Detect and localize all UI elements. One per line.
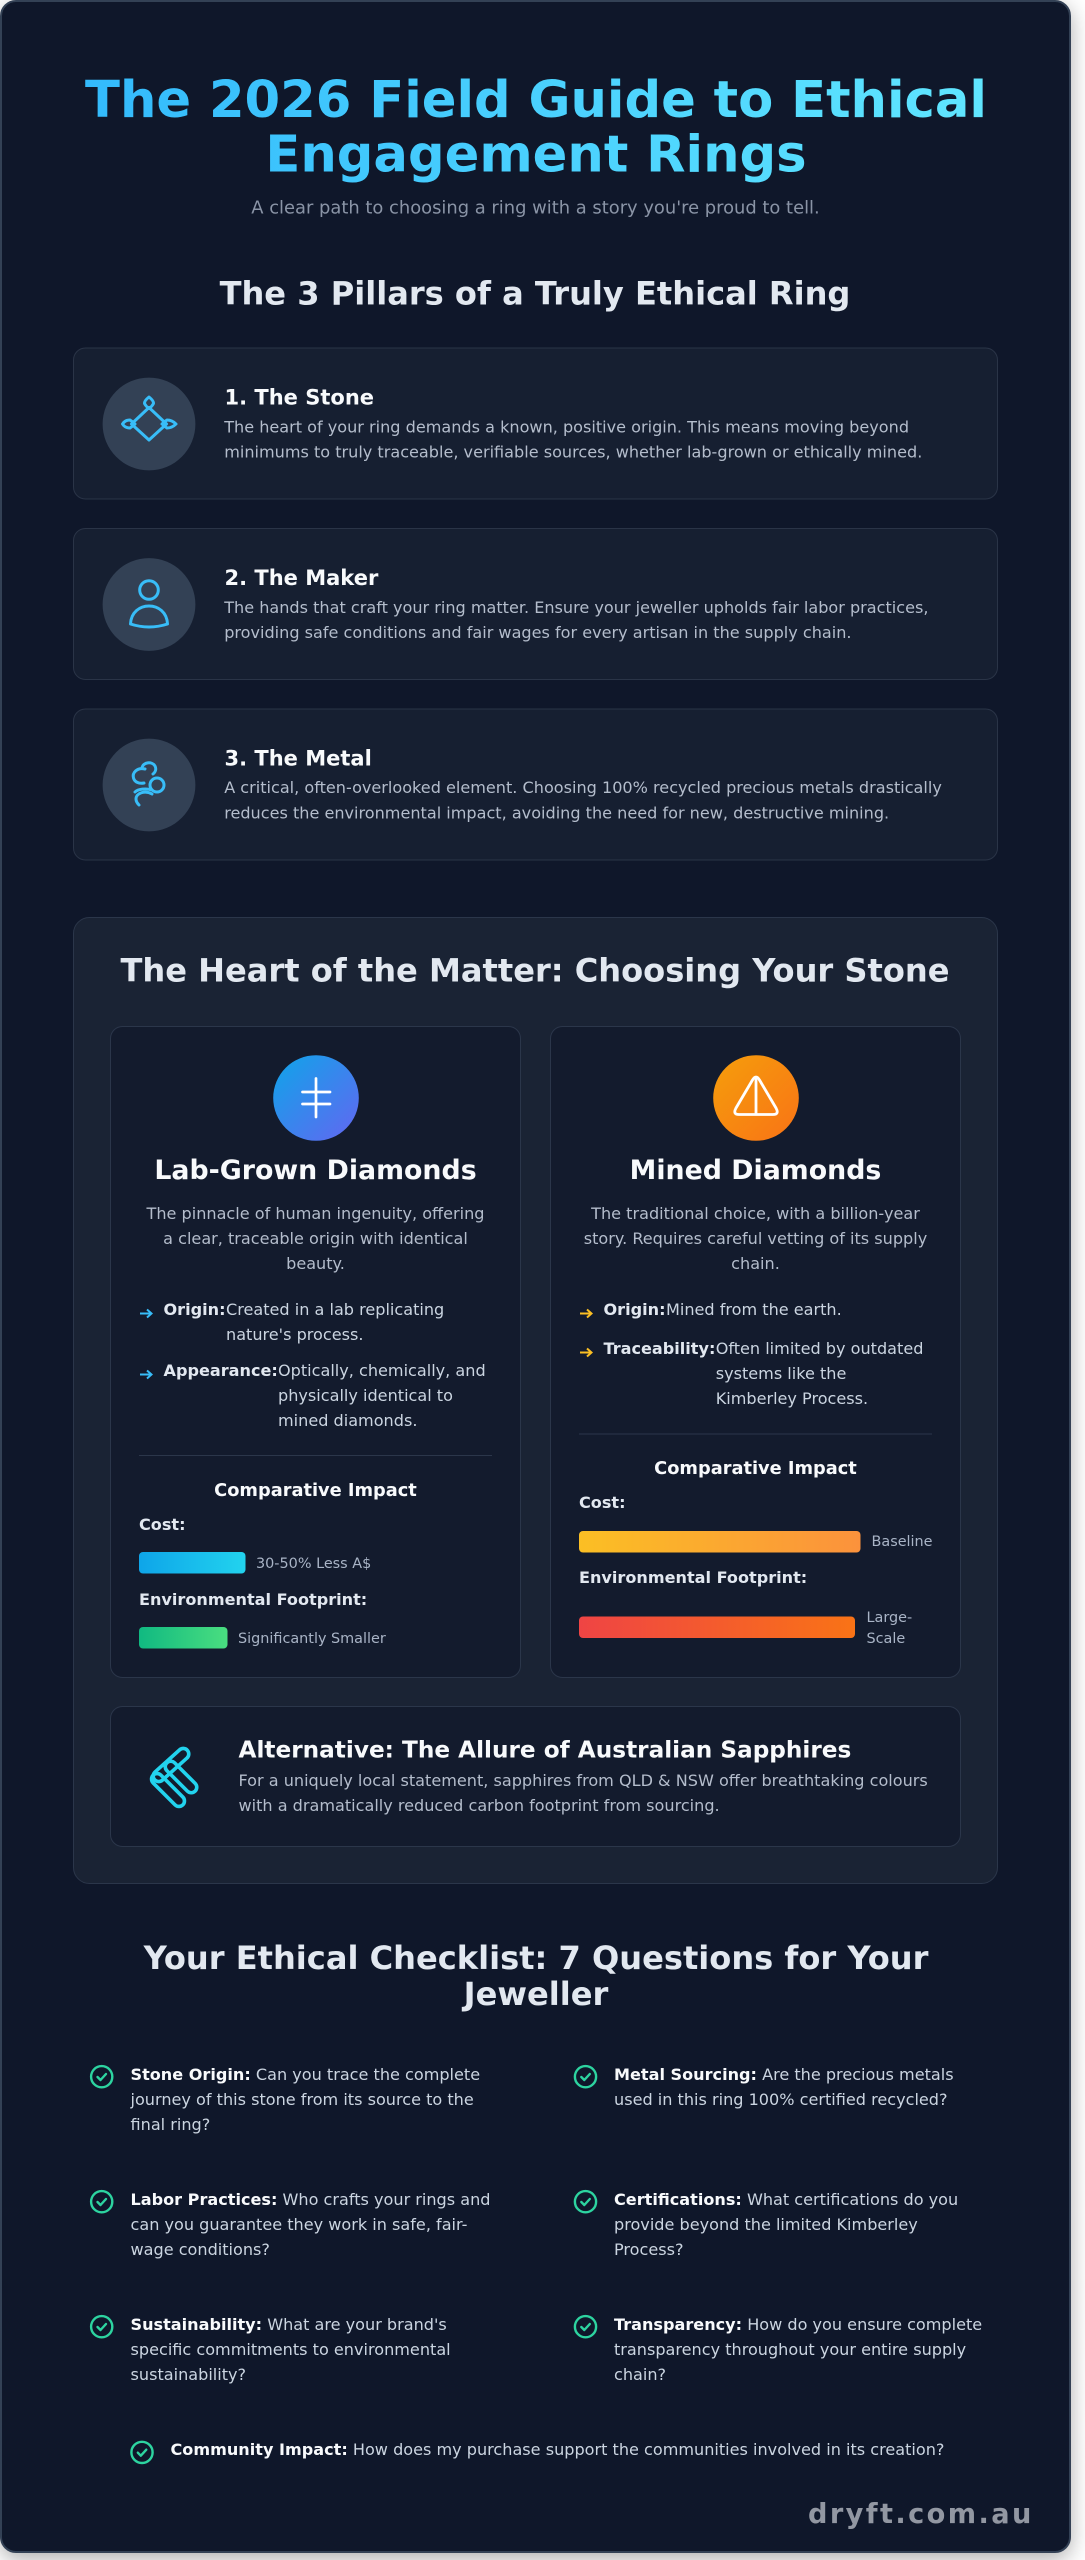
metal text: A critical, often-overlooked element. Choosing 100% recycled precious metals drastically [224,778,942,797]
list item: traceability [580,1339,923,1408]
bar: cost [139,1515,371,1574]
list item: origin: nature's process. [226,1325,364,1344]
list item: appearance: Appearance: [164,1361,278,1380]
panel: choosing your stone [74,918,998,1884]
title: The 2026 Field Guide to Ethical [85,70,987,130]
checklist item: community impact: Community Impact: How does my purchase support the communities involved in its creation? [170,2440,944,2459]
checklist item: stone origin: Stone Origin: Can you trace the complete [130,2065,480,2084]
panel: the metal [74,709,998,860]
maker text: The hands that craft your ring matter. Ensure your jeweller upholds fair labor practices, [223,598,928,617]
callout text: Alternative: The Allure of Australian Sapphires [238,1736,851,1764]
heading: checklist: Your Ethical Checklist: 7 Questions for Your [143,1939,929,1977]
checklist item: sustainability: sustainability? [130,2365,246,2384]
checklist item: certifications: provide beyond the limited Kimberley [614,2215,918,2234]
card description: story. Requires careful vetting of its supply [584,1229,928,1248]
stone text [223,386,922,461]
card heading: Lab-Grown Diamonds [154,1155,477,1186]
brand watermark: dryft.com.au [808,2499,1034,2530]
checklist item: transparency: transparency throughout your entire supply [614,2340,967,2359]
title [85,70,987,184]
list item: origin: Origin: [164,1300,226,1319]
list item: origin: Mined from the earth. [666,1300,842,1319]
list item: appearance: Optically, chemically, and [278,1361,486,1380]
bar: environmental footprint: Significantly Smaller [238,1631,386,1647]
list item: appearance: mined diamonds. [278,1411,417,1430]
icon: person [103,558,195,651]
metal text: reduces the environmental impact, avoiding the need for new, destructive mining. [224,803,889,822]
bar: cost: Cost: [579,1493,626,1512]
checklist item: stone origin: final ring? [130,2115,210,2134]
heading: 3 pillars: The 3 Pillars of a Truly Ethical Ring [220,274,850,312]
callout text: with a dramatically reduced carbon footprint from sourcing. [238,1796,720,1815]
callout text [238,1736,928,1815]
card description: a clear, traceable origin with identical [163,1229,468,1248]
bar: environmental footprint: Scale [866,1631,905,1647]
card: mined diamonds [550,1026,960,1678]
list item: appearance [140,1361,486,1430]
bar: cost: Cost: [139,1515,186,1534]
checklist item: certifications [575,2190,958,2259]
title: Engagement Rings [265,124,807,184]
icon: mined warning [713,1055,799,1141]
icon: diamond [103,378,195,470]
bar: cost [579,1493,933,1552]
heading: checklist [143,1939,929,2013]
bar: cost: Baseline [872,1534,933,1550]
card: lab-grown diamonds [110,1026,520,1678]
callout: australian sapphires [110,1706,960,1846]
icon: sapphire [149,1746,199,1809]
checklist item: certifications: Certifications: What certifications do you [614,2190,958,2209]
maker text: 2. The Maker [224,566,379,590]
icon: recycled metal [103,739,195,831]
heading: choosing your stone: The Heart of the Matter: Choosing Your Stone [120,952,950,990]
metal text: 3. The Metal [224,747,372,771]
panel: the maker [74,528,998,680]
checklist item: labor practices: can you guarantee they work in safe, fair- [130,2215,468,2234]
list item: origin [140,1300,444,1344]
card heading: Mined Diamonds [630,1155,881,1186]
checklist item: metal sourcing [575,2065,954,2109]
list item: traceability: Kimberley Process. [716,1389,868,1408]
checklist item: certifications: Process? [614,2240,684,2259]
bar: environmental footprint: Large- [866,1610,912,1626]
checklist item: labor practices: Labor Practices: Who crafts your rings and [130,2190,490,2209]
stone text: 1. The Stone [224,386,374,410]
checklist item: metal sourcing: used in this ring 100% certified recycled? [614,2090,948,2109]
stone text: The heart of your ring demands a known, positive origin. This means moving beyond [223,417,909,436]
list item: origin: Created in a lab replicating [226,1300,444,1319]
card description: beauty. [286,1254,345,1273]
list item: appearance: physically identical to [278,1386,453,1405]
card description: The traditional choice, with a billion-year [590,1204,920,1223]
heading: comparative impact: Comparative Impact [214,1480,417,1501]
maker text [223,566,928,642]
card description: chain. [731,1254,780,1273]
checklist item: transparency: chain? [614,2365,666,2384]
checklist item: sustainability [91,2315,451,2384]
maker text: providing safe conditions and fair wages for every artisan in the supply chain. [224,623,852,642]
checklist item: labor practices [91,2190,490,2259]
checklist item: stone origin [91,2065,480,2134]
checklist item: transparency: Transparency: How do you ensure complete [614,2315,982,2334]
metal text [224,747,942,822]
bar: environmental footprint [139,1590,386,1648]
bar: environmental footprint: Environmental Footprint: [139,1590,367,1609]
stone text: minimums to truly traceable, verifiable sources, whether lab-grown or ethically mined. [224,442,922,461]
panel: the stone [74,348,998,499]
checklist item: sustainability: specific commitments to environmental [130,2340,451,2359]
checklist item: transparency [575,2315,982,2384]
checklist item: metal sourcing: Metal Sourcing: Are the precious metals [614,2065,954,2084]
list item: traceability: systems like the [716,1364,846,1383]
checklist item: sustainability: Sustainability: What are your brand's [130,2315,447,2334]
card description: The pinnacle of human ingenuity, offering [146,1204,484,1223]
icon: lab-grown [273,1055,359,1141]
callout text: For a uniquely local statement, sapphires from QLD & NSW offer breathtaking colours [238,1771,928,1790]
checklist item: stone origin: journey of this stone from its source to the [130,2090,474,2109]
heading: comparative impact: Comparative Impact [654,1458,857,1479]
bar: cost: 30-50% Less A$ [256,1556,371,1572]
list item: origin: Origin: [604,1300,666,1319]
list item: origin [580,1300,842,1319]
card description [146,1204,484,1273]
bar: environmental footprint [579,1568,912,1647]
heading: checklist: Jeweller [462,1975,609,2013]
bar: environmental footprint: Environmental Footprint: [579,1568,807,1587]
subtitle: A clear path to choosing a ring with a story you're proud to tell. [251,198,820,218]
list item: traceability: Often limited by outdated [716,1339,923,1358]
checklist item: labor practices: wage conditions? [130,2240,270,2259]
card description [584,1204,928,1273]
list item: traceability: Traceability: [604,1339,715,1358]
